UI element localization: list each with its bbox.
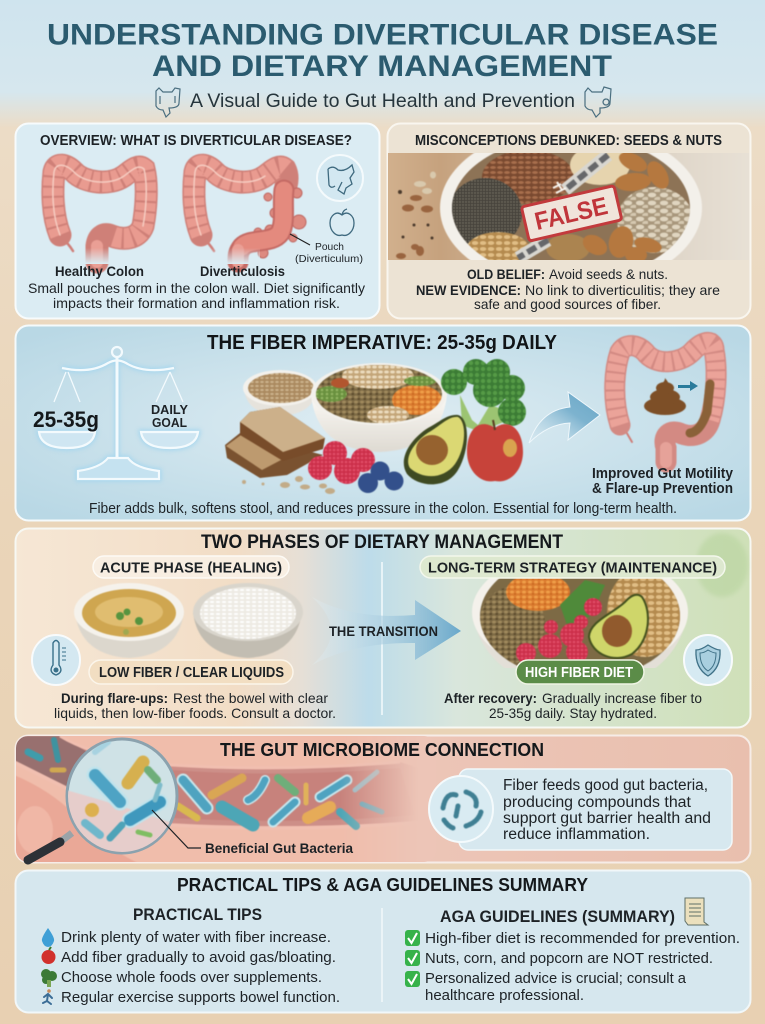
icon: magnifying glass with bacteria <box>28 739 178 860</box>
callout text <box>503 777 711 843</box>
tip: whole foods: Choose whole foods over supplements. <box>61 970 322 986</box>
acute phase text: Rest the bowel with clear <box>173 690 328 706</box>
label: pouch: (Diverticulum) <box>295 253 363 265</box>
icon: broccoli <box>41 969 57 987</box>
food: avocado <box>404 415 467 484</box>
divider <box>381 562 383 715</box>
illustration: intestine with bacteria <box>14 734 438 864</box>
pill: high fiber: HIGH FIBER DIET <box>525 665 633 681</box>
food: large mixed bowl <box>311 360 447 452</box>
label: pouch <box>295 241 363 265</box>
callout text: Fiber feeds good gut bacteria, <box>503 777 708 794</box>
pill: low fiber: LOW FIBER / CLEAR LIQUIDS <box>99 665 284 681</box>
icon: apple <box>330 209 354 235</box>
tip: fiber gradually: Add fiber gradually to avoid gas/bloating. <box>61 950 336 966</box>
arrow: small motion <box>678 381 698 391</box>
misconceptions heading: MISCONCEPTIONS DEBUNKED: SEEDS & NUTS <box>415 133 722 149</box>
stamp: false: FALSE <box>532 192 610 236</box>
callout text: reduce inflammation. <box>503 826 650 843</box>
scale label: daily goal <box>151 402 188 430</box>
label: beneficial bacteria: Beneficial Gut Bacteria <box>205 841 353 856</box>
guideline 1: High-fiber diet is recommended for prevention. <box>425 931 740 947</box>
overview body text <box>28 280 365 311</box>
pointer line <box>152 810 201 848</box>
icon: check 1 <box>405 930 420 946</box>
food: soup bowl <box>74 583 184 658</box>
tip: water: Drink plenty of water with fiber increase. <box>61 930 331 946</box>
pill: acute phase: ACUTE PHASE (HEALING) <box>100 560 282 576</box>
panel: gut microbiome <box>14 734 750 864</box>
misconceptions text: Avoid seeds & nuts. <box>549 266 668 282</box>
title <box>47 18 718 83</box>
icon: check 3 <box>405 971 420 987</box>
misconceptions text <box>416 266 720 312</box>
overview body text: Small pouches form in the colon wall. Diet significantly <box>28 280 365 296</box>
long-term text <box>444 690 702 721</box>
arrow: to motility <box>529 392 600 443</box>
phases heading: TWO PHASES OF DIETARY MANAGEMENT <box>201 532 563 553</box>
fade under colons <box>80 248 260 264</box>
illustration: colon with stool <box>615 342 716 462</box>
summary heading: PRACTICAL TIPS & AGA GUIDELINES SUMMARY <box>177 874 589 895</box>
fade to panel <box>340 734 438 864</box>
motility caption: Improved Gut Motility <box>592 466 733 482</box>
panel: overview <box>16 124 380 318</box>
misconceptions text: No link to diverticulitis; they are <box>525 282 720 298</box>
pill: low fiber <box>89 660 293 684</box>
illustration: healthy colon <box>53 165 146 262</box>
icon: scroll <box>685 898 708 925</box>
icon: thermometer badge <box>32 635 80 685</box>
food: crumbs <box>242 476 335 494</box>
icon: shield badge <box>684 635 732 685</box>
icon: runner <box>43 989 52 1004</box>
icon: colon outline right <box>585 87 611 117</box>
tip: exercise: Regular exercise supports bowel function. <box>61 990 340 1006</box>
icon: colon badge <box>317 155 363 201</box>
food: bread slices <box>225 407 325 478</box>
scale label: daily goal: DAILY <box>151 402 188 417</box>
food: small grain bowl <box>243 370 317 416</box>
callout text: support gut barrier health and <box>503 810 711 827</box>
misconceptions text: NEW EVIDENCE: <box>416 282 521 298</box>
arrow: pouch pointer <box>290 234 310 245</box>
panel: fiber imperative <box>16 326 750 520</box>
motility caption: & Flare-up Prevention <box>592 481 733 497</box>
title: AND DIETARY MANAGEMENT <box>152 50 612 83</box>
guideline 3 <box>425 971 687 1004</box>
pill: high fiber <box>516 660 644 684</box>
label: pouch: Pouch <box>315 241 344 253</box>
food: rice bowl <box>193 583 303 658</box>
guidelines heading: AGA GUIDELINES (SUMMARY) <box>440 907 675 926</box>
food: raspberries <box>308 441 375 484</box>
icon: stool <box>644 378 686 415</box>
callout card <box>429 769 732 850</box>
callout text: producing compounds that <box>503 794 692 811</box>
long-term text: Gradually increase fiber to <box>542 690 702 706</box>
stamp: false <box>521 186 622 241</box>
guideline 3: healthcare professional. <box>425 988 584 1004</box>
guideline 2: Nuts, corn, and popcorn are NOT restricted. <box>425 951 713 967</box>
food: high-fiber bowl <box>472 578 688 668</box>
motility caption <box>592 466 733 497</box>
overview body text: impacts their formation and inflammation risk. <box>53 295 340 311</box>
icon: water drop <box>42 928 54 947</box>
guideline 3: Personalized advice is crucial; consult a <box>425 971 687 987</box>
illustration: diverticulosis colon <box>194 165 306 262</box>
microbiome heading: THE GUT MICROBIOME CONNECTION <box>220 739 544 760</box>
panel: two phases <box>16 528 750 728</box>
photo: bowl of seeds and nuts <box>388 153 712 260</box>
title: UNDERSTANDING DIVERTICULAR DISEASE <box>47 18 718 52</box>
panel: practical tips and guidelines <box>16 870 750 1012</box>
fiber body text: Fiber adds bulk, softens stool, and reduces pressure in the colon. Essential for long-term health. <box>89 501 677 517</box>
practical tips heading: PRACTICAL TIPS <box>133 905 262 924</box>
icon: check 2 <box>405 950 420 966</box>
misconceptions text: OLD BELIEF: <box>467 266 545 282</box>
overview heading: OVERVIEW: WHAT IS DIVERTICULAR DISEASE? <box>40 133 352 149</box>
scale label: 25-35g: 25-35g <box>33 407 99 432</box>
food: broccoli <box>441 359 526 432</box>
divider <box>381 908 383 1002</box>
pill: long-term strategy: LONG-TERM STRATEGY (MAINTENANCE) <box>428 560 717 576</box>
panel: misconceptions <box>385 124 752 318</box>
misconceptions text: safe and good sources of fiber. <box>474 296 661 312</box>
acute phase text: liquids, then low-fiber foods. Consult a doctor. <box>54 705 336 721</box>
icon: apple <box>42 947 56 964</box>
label: healthy colon: Healthy Colon <box>55 264 144 279</box>
leaf blur corner <box>696 533 748 597</box>
arrow: the transition <box>312 597 461 665</box>
scale label: daily goal: GOAL <box>152 415 187 430</box>
broken chain <box>518 155 608 258</box>
icon: colon outline left <box>156 88 180 117</box>
food: blueberries <box>358 462 404 493</box>
food: apple <box>467 420 523 481</box>
icon: bacteria badge <box>429 776 493 842</box>
acute phase text <box>54 690 336 721</box>
long-term text: After recovery: <box>444 690 537 706</box>
subtitle: A Visual Guide to Gut Health and Prevention <box>190 90 575 112</box>
fiber heading: THE FIBER IMPERATIVE: 25-35g DAILY <box>207 332 558 354</box>
long-term text: 25-35g daily. Stay hydrated. <box>489 705 657 721</box>
label: diverticulosis: Diverticulosis <box>200 264 285 279</box>
acute phase text: During flare-ups: <box>61 690 168 706</box>
icon: balance scale <box>39 347 198 479</box>
transition label: THE TRANSITION <box>329 624 438 639</box>
